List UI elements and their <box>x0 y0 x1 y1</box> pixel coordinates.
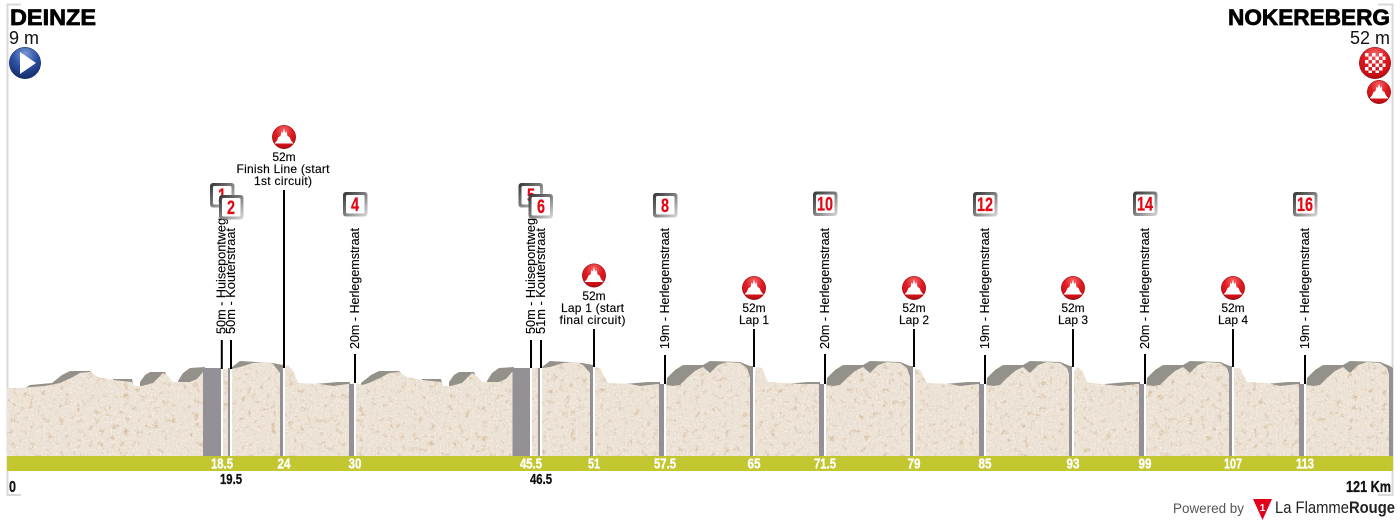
distance labels: 24 <box>278 456 290 472</box>
climb: finish line: 1st circuit) <box>254 174 312 188</box>
climb: lap 1 start final circuit: final circuit) <box>560 313 626 327</box>
marker lines <box>222 190 1305 384</box>
sector labels: 50m - Huisepontweg <box>214 218 228 334</box>
sector sign 2: 2 <box>227 197 235 219</box>
sector labels: 20m - Herlegemstraat <box>347 228 362 349</box>
sector sign 5: 5 <box>527 185 535 207</box>
sector labels: 20m - Herlegemstraat <box>1137 228 1152 349</box>
sector sign 6 <box>528 194 553 218</box>
distance labels <box>211 456 1314 488</box>
climb: lap 2: 52m <box>902 301 926 315</box>
distance band <box>7 456 1393 471</box>
distance labels: 18.5 <box>211 456 233 472</box>
sector labels: 50m - Huisepontweg <box>523 218 538 334</box>
climb: lap 4: Lap 4 <box>1218 313 1248 327</box>
finish elevation: 52 m <box>1350 28 1390 48</box>
textured terrain <box>7 355 1393 456</box>
climb: lap 1 start final circuit: Lap 1 (start <box>561 301 625 315</box>
climb: finish line: 52m <box>272 150 296 164</box>
sector labels: 50m - Kouterstraat <box>223 228 238 334</box>
icon: finish checker <box>1359 47 1391 79</box>
icon: La Flamme Rouge logo <box>1253 499 1272 520</box>
climb: lap 1 start final circuit: 52m <box>582 289 606 303</box>
distance labels: 51 <box>588 456 600 472</box>
distance labels: 71.5 <box>814 456 836 472</box>
sector labels: 51m - Kouterstraat <box>533 228 548 334</box>
elevation profile <box>7 355 1393 456</box>
distance labels: 107 <box>1224 456 1242 472</box>
climb: lap 2: Lap 2 <box>899 313 929 327</box>
sector sign 8: 8 <box>661 195 669 217</box>
distance labels: 79 <box>908 456 920 472</box>
start elevation: 9 m <box>9 28 39 48</box>
icon: start <box>9 47 41 79</box>
icon: La Flamme Rouge logo: 1 <box>1260 503 1266 514</box>
distance labels: 85 <box>978 456 992 472</box>
climb: lap 4: 52m <box>1221 301 1245 315</box>
sector labels: 20m - Herlegemstraat <box>817 228 832 349</box>
climb: lap 3: Lap 3 <box>1058 313 1088 327</box>
distance labels: 57.5 <box>654 456 676 472</box>
sector sign 4: 4 <box>351 194 359 216</box>
hill shadows <box>25 361 1393 392</box>
distance labels: 93 <box>1066 456 1080 472</box>
climb: lap 3: 52m <box>1061 301 1085 315</box>
sector sign 14: 14 <box>1137 194 1153 216</box>
sector sign 5 <box>518 183 543 208</box>
climb: finish line <box>236 125 330 188</box>
icon: finish climb <box>1367 80 1391 104</box>
distance labels: 30 <box>348 456 362 472</box>
climb: lap 1: Lap 1 <box>739 313 769 327</box>
sector labels <box>214 218 1312 349</box>
sector sign 1 <box>210 183 234 208</box>
sector labels: 19m - Herlegemstraat <box>1297 228 1312 349</box>
distance labels: 19.5 <box>220 472 242 488</box>
climb: lap 3 <box>1058 276 1088 327</box>
distance labels: 113 <box>1296 456 1314 472</box>
sector labels: 19m - Herlegemstraat <box>657 228 672 349</box>
distance labels: 65 <box>748 456 760 472</box>
sector sign 4 <box>343 192 368 216</box>
climb: lap 1 <box>739 276 769 327</box>
sector sign 6: 6 <box>537 196 545 218</box>
sector labels: 19m - Herlegemstraat <box>977 228 992 349</box>
climb: lap 2 <box>899 276 929 327</box>
climb: lap 1 start final circuit <box>560 264 626 327</box>
distance labels: 99 <box>1138 456 1152 472</box>
powered by credit: Powered by <box>1173 500 1244 516</box>
climb and sector strips <box>203 368 1393 456</box>
start title: DEINZE <box>10 5 96 30</box>
climb: lap 4 <box>1218 276 1248 327</box>
sector sign 1: 1 <box>218 185 226 207</box>
climb: finish line: Finish Line (start <box>236 162 330 176</box>
distance labels: 46.5 <box>530 472 552 488</box>
distance labels: 45.5 <box>520 456 542 472</box>
brand name: La FlammeRouge <box>1275 499 1395 517</box>
sector sign 2 <box>219 195 244 220</box>
finish title: NOKEREBERG <box>1228 5 1390 30</box>
sector sign 8 <box>653 193 678 218</box>
sector sign 16: 16 <box>1297 194 1313 216</box>
sector sign 12: 12 <box>977 194 993 216</box>
climb: lap 1: 52m <box>742 301 766 315</box>
sector sign 10: 10 <box>817 194 833 216</box>
start distance: 0 <box>9 479 16 496</box>
